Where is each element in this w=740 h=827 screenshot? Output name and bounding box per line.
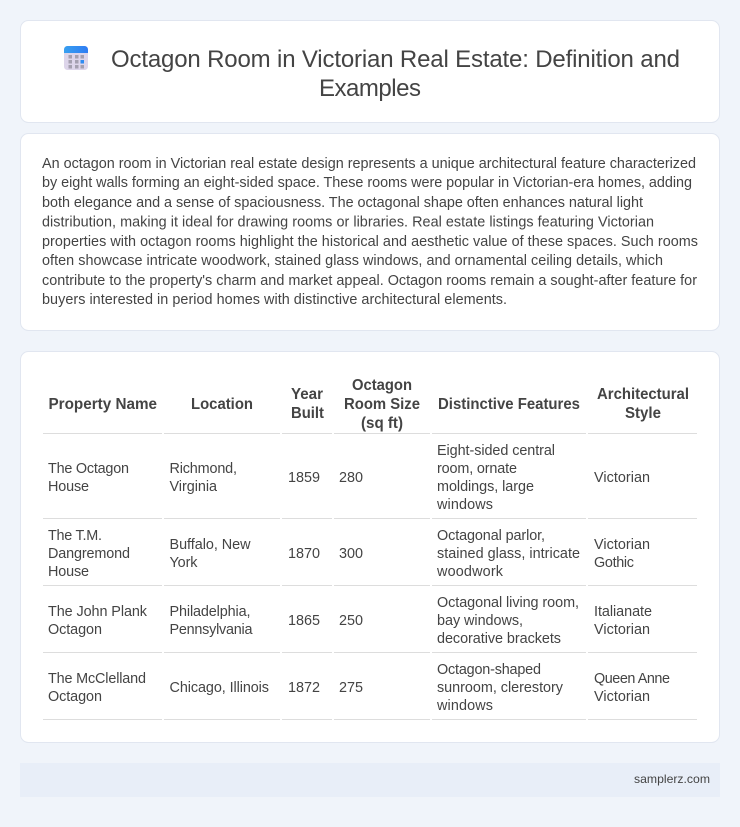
table row: The T.M. Dangremond House	[48, 528, 650, 580]
table header row: Octagon	[352, 377, 412, 394]
text block: introduction paragraph	[42, 156, 698, 308]
footer: samplerz.com	[634, 772, 710, 786]
table row: The McClelland Octagon: 1872	[288, 680, 320, 696]
table row: The McClelland Octagon: sunroom, clerestory	[437, 680, 564, 696]
title: Examples	[319, 75, 421, 102]
table row: The Octagon House: 1859	[288, 470, 320, 486]
table row: The McClelland Octagon: Queen Anne	[594, 671, 670, 687]
panel: introduction	[20, 134, 720, 330]
text block: introduction paragraph: properties with octagon rooms highlight the historical and aesthetic value of these spaces. Such rooms	[42, 234, 698, 250]
table header row: Style	[625, 405, 661, 422]
table row: The John Plank Octagon: Italianate	[594, 604, 652, 620]
text block: introduction paragraph: both elegance and a sense of spaciousness. The octagonal shape often enhances natural light	[42, 195, 643, 211]
table row: The McClelland Octagon: 275	[339, 680, 363, 696]
text block: introduction paragraph: by eight walls forming an eight-sided space. These rooms were popular in Victorian-era homes, adding	[42, 175, 692, 191]
table row: The Octagon House: 280	[339, 470, 363, 486]
table row: The Octagon House: windows	[436, 497, 493, 513]
table header row: Property Name	[48, 396, 157, 413]
table row: The T.M. Dangremond House: The T.M.	[48, 528, 102, 544]
table row: The Octagon House: House	[48, 479, 89, 495]
table row: The John Plank Octagon: Philadelphia,	[170, 604, 250, 620]
table row: The T.M. Dangremond House: Victorian	[594, 537, 650, 553]
table row: The McClelland Octagon	[48, 662, 670, 714]
table row: The T.M. Dangremond House: woodwork	[436, 564, 504, 580]
panel: title card	[20, 20, 720, 122]
table row: The John Plank Octagon: Victorian	[594, 622, 650, 638]
table row: The McClelland Octagon: Octagon-shaped	[437, 662, 541, 678]
icon: calendar	[64, 46, 88, 70]
table header row: Distinctive Features	[438, 396, 580, 413]
table row: The John Plank Octagon: 250	[339, 613, 363, 629]
table row: The Octagon House: Virginia	[170, 479, 217, 495]
table header row	[48, 377, 689, 432]
table row: The John Plank Octagon: Pennsylvania	[170, 622, 252, 638]
table row: The John Plank Octagon: bay windows,	[437, 613, 523, 629]
table row: The T.M. Dangremond House: Gothic	[594, 555, 634, 571]
table row: The Octagon House	[48, 443, 650, 513]
table row: The John Plank Octagon: 1865	[288, 613, 320, 629]
table row: The Octagon House: The Octagon	[48, 461, 129, 477]
table header row: Year	[291, 386, 323, 403]
table row: The McClelland Octagon: The McClelland	[48, 671, 146, 687]
table row: The McClelland Octagon: Victorian	[594, 689, 650, 705]
table header row: Architectural	[597, 386, 689, 403]
table header row: Room Size	[344, 396, 420, 413]
table row: The T.M. Dangremond House: Octagonal parlor,	[437, 528, 545, 544]
table row: The T.M. Dangremond House: Buffalo, New	[170, 537, 251, 553]
text block: introduction paragraph: often showcase intricate woodwork, stained glass windows, and ornamental ceiling details, which	[42, 253, 663, 269]
table header row: (sq ft)	[361, 415, 403, 432]
table row: The T.M. Dangremond House: House	[48, 564, 89, 580]
text block: introduction paragraph: distribution, making it ideal for drawing rooms or libraries. Real estate listings featuring Victorian	[42, 214, 654, 230]
table row: The John Plank Octagon: Octagon	[48, 622, 102, 638]
table row: The Octagon House: Eight-sided central	[437, 443, 555, 459]
text block: introduction paragraph: contribute to the property's charm and market appeal. Octagon rooms remain a sought-after feature for	[42, 273, 697, 289]
table row: The T.M. Dangremond House: stained glass, intricate	[437, 546, 580, 562]
footer	[20, 763, 720, 797]
table row: The Octagon House: Victorian	[594, 470, 650, 486]
table row: The T.M. Dangremond House: 300	[339, 546, 363, 562]
table row: The John Plank Octagon: decorative brackets	[437, 631, 561, 647]
table header row: Built	[291, 405, 325, 422]
table row: The John Plank Octagon: Octagonal living room,	[437, 595, 579, 611]
table row: The McClelland Octagon: Octagon	[48, 689, 102, 705]
title: Octagon Room in Victorian Real Estate: Definition and	[111, 46, 680, 73]
table row: The Octagon House: room, ornate	[437, 461, 517, 477]
table row: The T.M. Dangremond House: Dangremond	[48, 546, 130, 562]
table row: The John Plank Octagon: The John Plank	[48, 604, 148, 620]
panel: property table	[20, 352, 720, 742]
table row: The McClelland Octagon: Chicago, Illinois	[170, 680, 269, 696]
table header row: Location	[191, 396, 253, 413]
text block: introduction paragraph: buyers interested in period homes with distinctive architectural elements.	[42, 292, 507, 308]
text block: introduction paragraph: An octagon room in Victorian real estate design represents a unique architectural feature characterized	[42, 156, 696, 172]
table row: The Octagon House: Richmond,	[170, 461, 237, 477]
table row: The Octagon House: moldings, large	[437, 479, 534, 495]
table row: The T.M. Dangremond House: 1870	[288, 546, 320, 562]
title	[111, 46, 680, 102]
table row: The McClelland Octagon: windows	[436, 698, 493, 714]
table row: The T.M. Dangremond House: York	[170, 555, 198, 571]
table row: The John Plank Octagon	[48, 595, 652, 647]
